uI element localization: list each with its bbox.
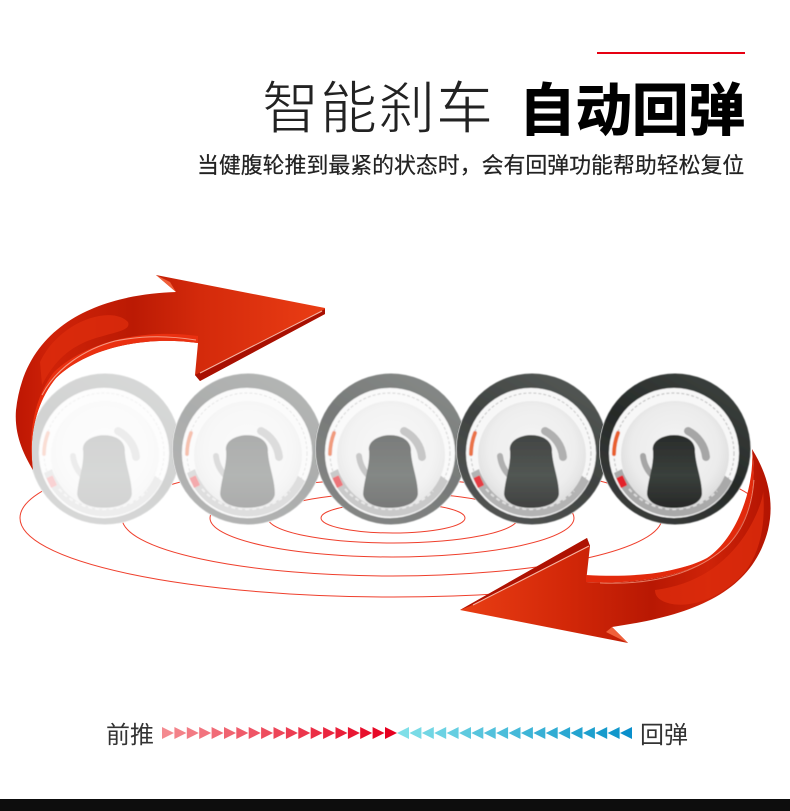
- bottom black bar: [0, 799, 790, 811]
- wheel 4: [456, 373, 608, 525]
- wheel 2: [172, 373, 324, 525]
- label: rebound: 回弹: [640, 722, 688, 749]
- progress arrows: red forward: [162, 727, 397, 739]
- progress arrows: blue rebound: [397, 727, 632, 739]
- arrow: rebound, curving back left: [460, 449, 771, 643]
- title: bold part: 自动回弹: [519, 79, 745, 142]
- arrow: forward push, curving right: [16, 275, 325, 470]
- title: [262, 77, 745, 142]
- concentric ripple ellipses: [20, 439, 766, 597]
- wheel 5 (solid): [599, 373, 751, 525]
- label: forward push: 前推: [106, 722, 154, 749]
- subtitle: 当健腹轮推到最紧的状态时，会有回弹功能帮助轻松复位: [197, 153, 744, 178]
- wheel 1 (faintest): [29, 373, 181, 525]
- accent line: [597, 52, 745, 54]
- wheel 3: [315, 373, 467, 525]
- title: light part: 智能刹车: [262, 77, 494, 141]
